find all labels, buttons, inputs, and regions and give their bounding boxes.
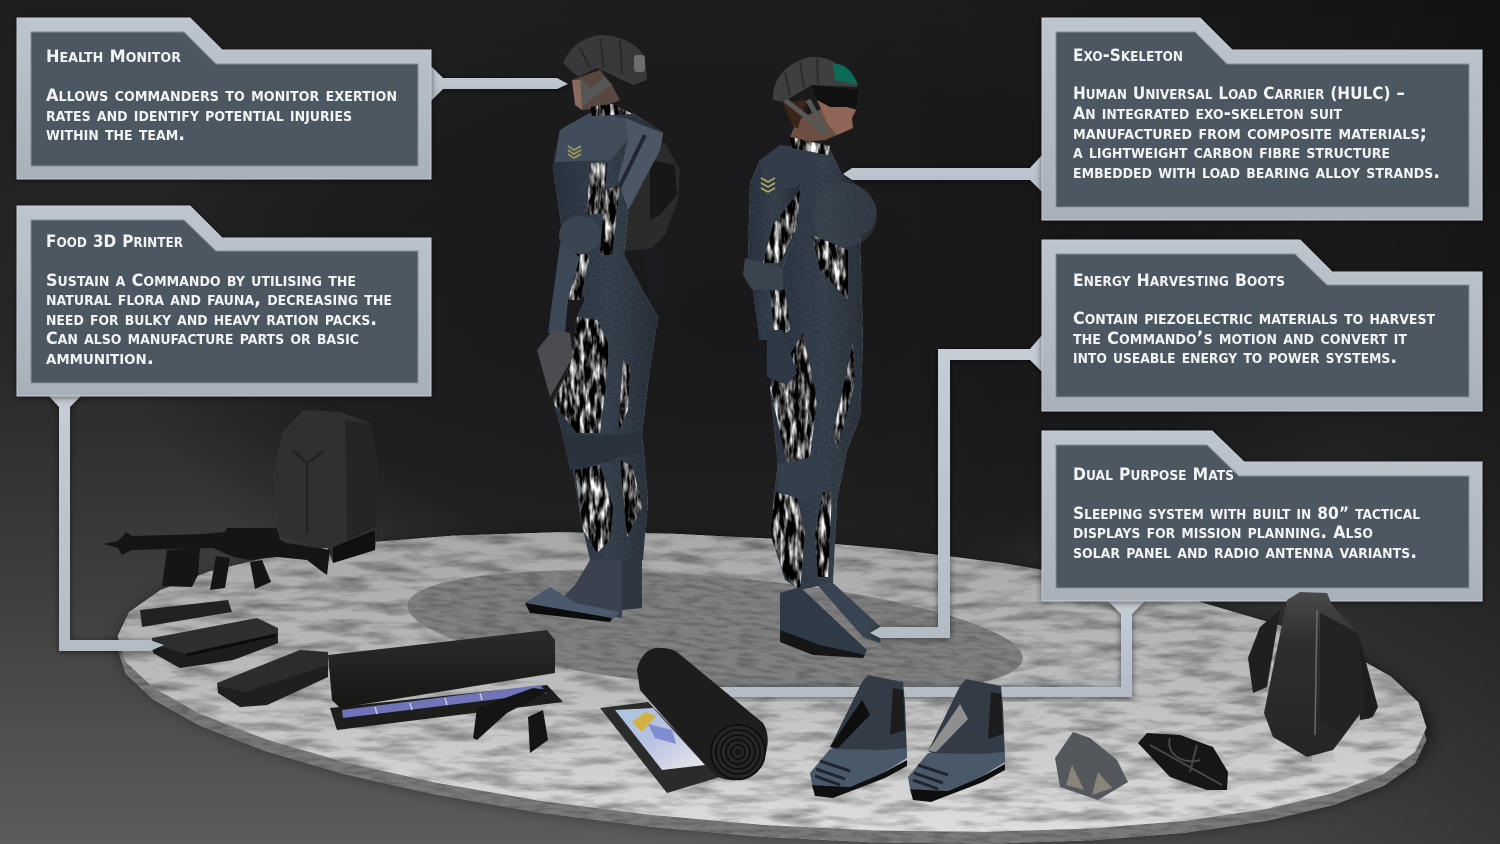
body suit xyxy=(770,140,876,590)
item: battery pack one xyxy=(152,618,278,668)
panel: Food 3D Printer xyxy=(17,206,431,396)
item: backpack xyxy=(273,410,378,563)
collar xyxy=(790,137,830,155)
body text: displays for mission planning. Also xyxy=(1073,522,1373,543)
shoulder xyxy=(760,145,817,192)
item: map mat xyxy=(600,702,720,793)
knee pad xyxy=(777,458,825,503)
collar xyxy=(590,104,633,116)
heading: Energy Harvesting Boots xyxy=(1073,270,1285,291)
item: magazine xyxy=(140,600,232,627)
helmet strap xyxy=(785,100,827,133)
body text: manufactured from composite materials; xyxy=(1073,123,1427,144)
main shell xyxy=(1264,592,1365,757)
item: rifle xyxy=(103,528,330,590)
chest shade xyxy=(813,183,877,247)
boot xyxy=(560,560,622,618)
connector: Dual Purpose Mats xyxy=(700,601,1145,697)
body suit xyxy=(553,113,663,560)
heading: Exo-Skeleton xyxy=(1073,45,1183,66)
helmet strap xyxy=(580,78,612,108)
roll end spiral xyxy=(711,725,765,779)
panel: Exo-Skeleton xyxy=(1042,18,1482,220)
heading: Health Monitor xyxy=(46,46,181,67)
item: pistol grip xyxy=(473,688,550,753)
silver side patch xyxy=(833,343,855,450)
silver chest patch xyxy=(812,235,848,300)
silver thigh patch xyxy=(553,317,608,433)
item: solar mat xyxy=(330,685,563,730)
side buckle xyxy=(1350,718,1372,733)
far boot xyxy=(813,580,882,643)
helmet xyxy=(563,35,647,85)
face xyxy=(817,100,858,135)
body text: a lightweight carbon fibre structure xyxy=(1073,142,1390,163)
body text: embedded with load bearing alloy strands. xyxy=(1073,162,1440,183)
right panel xyxy=(1320,613,1365,733)
item: boots xyxy=(810,675,1005,802)
heading: Food 3D Printer xyxy=(46,231,183,252)
silver back patch xyxy=(600,185,620,255)
panel: Health Monitor xyxy=(17,18,431,179)
body text xyxy=(46,85,397,145)
shoulder panel xyxy=(618,118,663,210)
connector: Energy Harvesting Boots xyxy=(870,335,1042,638)
green sensor patch xyxy=(833,64,858,85)
body text: Human Universal Load Carrier (HULC) – xyxy=(1073,83,1405,104)
upper sleeve top xyxy=(555,113,628,162)
panel: Energy Harvesting Boots xyxy=(1042,240,1482,411)
body text: ammunition. xyxy=(46,348,154,369)
item: shell insole xyxy=(1138,733,1228,790)
helmet ribs xyxy=(785,58,818,96)
body text xyxy=(1073,308,1435,368)
item: fin insole xyxy=(1055,732,1128,800)
body text: Allows commanders to monitor exertion xyxy=(46,85,397,106)
visor xyxy=(812,85,858,110)
body text: Contain piezoelectric materials to harvest xyxy=(1073,308,1435,329)
backpack hollow xyxy=(650,160,677,220)
item: armour vest xyxy=(1248,592,1378,764)
item: rolled mat xyxy=(328,630,555,708)
right figure: side view with visor xyxy=(743,57,882,658)
rank chevron xyxy=(568,146,581,158)
panel: Dual Purpose Mats xyxy=(1042,431,1482,601)
far boot xyxy=(622,560,642,610)
silver shin patches xyxy=(575,465,613,553)
glove xyxy=(537,330,573,397)
silver thigh patch xyxy=(770,333,817,463)
rank chevron xyxy=(761,178,775,192)
body text: Sustain a Commando by utilising the xyxy=(46,270,356,291)
left wing xyxy=(1248,610,1280,693)
helmet ribs xyxy=(580,38,622,75)
boot xyxy=(780,587,867,658)
arm xyxy=(748,160,800,340)
right wing xyxy=(1358,633,1378,720)
forearm xyxy=(548,243,580,333)
helmet xyxy=(773,57,858,102)
backpack on figure xyxy=(610,143,680,252)
panel seam xyxy=(1315,610,1317,735)
connector: Food 3D Printer xyxy=(48,395,164,651)
stand xyxy=(1312,745,1335,764)
silver forearm patch xyxy=(566,253,590,300)
shoulder edge xyxy=(618,135,645,190)
item: battery pack two xyxy=(217,650,328,707)
boot one xyxy=(810,675,907,798)
item: mat roll with map xyxy=(637,648,768,780)
body text: Can also manufacture parts or basic xyxy=(46,328,359,349)
body text: into useable energy to power systems. xyxy=(1073,347,1397,368)
face and neck xyxy=(572,70,620,110)
connector: Health Monitor xyxy=(430,65,568,102)
body text: rates and identify potential injuries xyxy=(46,105,352,126)
left figure: rear view with backpack xyxy=(525,35,680,622)
body text: the Commando’s motion and convert it xyxy=(1073,328,1407,349)
silver forearm patch xyxy=(770,290,790,340)
helmet pad xyxy=(634,55,645,72)
body text: within the team. xyxy=(46,124,185,145)
platform xyxy=(118,532,1429,844)
hand xyxy=(767,330,797,385)
body text: An integrated exo-skeleton suit xyxy=(1073,103,1342,124)
body text: solar panel and radio antenna variants. xyxy=(1073,542,1417,563)
elbow pad xyxy=(559,216,601,254)
body text xyxy=(1073,503,1420,563)
boot two xyxy=(908,679,1005,802)
knee bands xyxy=(562,432,643,470)
connector: Exo-Skeleton xyxy=(843,155,1042,192)
heading: Dual Purpose Mats xyxy=(1073,464,1234,485)
body text: need for bulky and heavy ration packs. xyxy=(46,309,377,330)
silver rear thigh patch xyxy=(618,360,630,432)
body text: Sleeping system with built in 80” tactical xyxy=(1073,503,1420,524)
silver arm patch xyxy=(587,162,607,215)
body text: natural flora and fauna, decreasing the xyxy=(46,289,392,310)
elbow band xyxy=(743,258,783,290)
body text xyxy=(1073,83,1440,183)
neck xyxy=(790,105,837,142)
silver shin patches xyxy=(770,492,805,590)
hair xyxy=(783,100,807,128)
body text xyxy=(46,270,392,369)
silver arm patch xyxy=(763,190,800,263)
far arm xyxy=(643,247,663,295)
